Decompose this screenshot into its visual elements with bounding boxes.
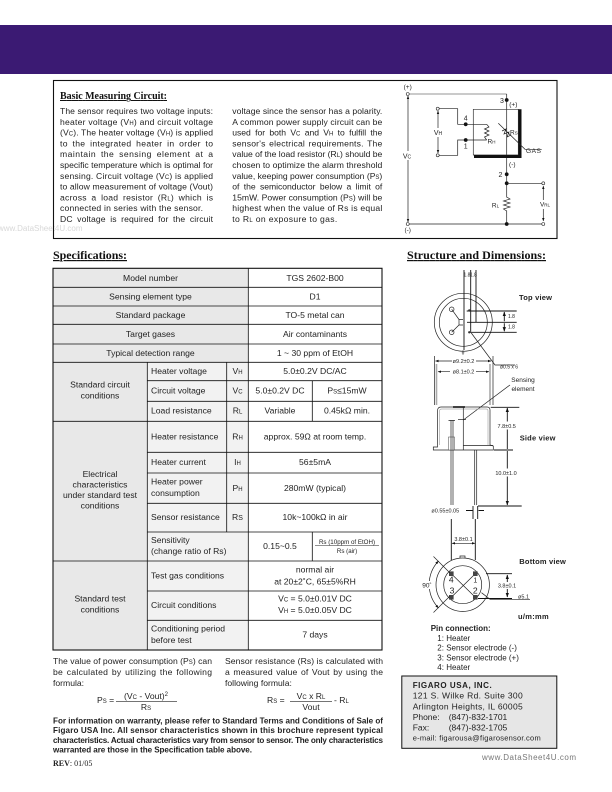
- text block: circuit description right column: used for both VC and VH to fulfill the: [232, 128, 383, 138]
- table group: electrical characteristics: Rs (air): [337, 548, 357, 555]
- diagram: top view: ø0.5 x 6: [500, 364, 518, 370]
- table group: electrical characteristics: conditions: [81, 500, 119, 510]
- revision note: REV: 01/05: [53, 759, 92, 768]
- text block: circuit description right column: [232, 106, 383, 224]
- table row: target gases: [126, 329, 347, 339]
- pin connection legend: Pin connection:: [431, 624, 491, 633]
- label: sensing element: element: [511, 386, 535, 393]
- table group: standard circuit conditions: [70, 366, 370, 416]
- text block: circuit description left column: The sensor requires two voltage inputs:: [60, 106, 213, 116]
- diagram: side view: ø9.2±0.2: [453, 359, 474, 365]
- specifications table: [53, 268, 382, 650]
- table group: electrical characteristics: approx. 59Ω at room temp.: [264, 432, 366, 442]
- table row: detection range: [106, 348, 353, 358]
- formula: power consumption: [97, 691, 177, 712]
- contact box: (847)-832-1701: [449, 712, 508, 722]
- table group: electrical characteristics: Heater power: [151, 476, 203, 486]
- text block: circuit description left column: DC voltage is required for the circuit: [60, 214, 214, 224]
- diagram: top view: 1.8: [470, 272, 477, 278]
- label: sensing element: [511, 377, 535, 393]
- pin connection legend: 2: Sensor electrode (-): [437, 644, 517, 653]
- label: top view: Top view: [519, 293, 552, 302]
- text block: power consumption formula intro: be calculated by utilizing the following: [53, 667, 212, 677]
- contact box: (847)-832-1705: [449, 723, 508, 733]
- text block: circuit description right column: to RL on exposure to gas.: [232, 214, 337, 224]
- text block: circuit description right column: 15mW. Power consumption (PS) will be: [232, 192, 383, 202]
- watermark: bottom right: www.DataSheet4U.com: [481, 753, 576, 762]
- label: units: u/m:mm: [518, 612, 549, 621]
- table group: standard circuit conditions: conditions: [81, 390, 119, 400]
- table group: standard test conditions: Conditioning period: [151, 624, 225, 634]
- formula: sensor resistance: VC x RL: [297, 691, 326, 701]
- table group: electrical characteristics: RS: [232, 512, 243, 522]
- circuit diagram: 2: [499, 172, 503, 179]
- heading: structure and dimensions: Structure and Dimensions:: [407, 248, 546, 262]
- text block: circuit description right column: value of the load resistor (RL) should be: [232, 149, 383, 159]
- table row: detection range: Typical detection range: [106, 348, 195, 358]
- table group: standard test conditions: VH = 5.0±0.05V DC: [278, 605, 352, 615]
- contact box: Phone:: [413, 712, 440, 722]
- table group: standard circuit conditions: PS≤15mW: [327, 386, 368, 396]
- table group: electrical characteristics: Heater current: [151, 457, 207, 467]
- table group: standard circuit conditions: VH: [232, 366, 243, 376]
- diagram: bottom view: 3.8±0.1: [498, 584, 516, 590]
- pin connection legend: 4: Heater: [437, 663, 471, 672]
- table group: standard circuit conditions: Circuit voltage: [151, 386, 206, 396]
- label: side view: Side view: [520, 434, 556, 443]
- text block: circuit description right column: voltage since the sensor has a polarity.: [232, 106, 382, 116]
- table group: electrical characteristics: consumption: [151, 488, 200, 498]
- circuit diagram: (-): [509, 162, 516, 168]
- circuit diagram: 4: [464, 116, 468, 122]
- text block: circuit description right column: chosen to optimize the alarm threshold: [232, 160, 383, 170]
- table row: sensing element type: Sensing element type: [109, 292, 192, 302]
- text block: circuit description left column: sensing. Circuit voltage (VC) is applied: [60, 171, 213, 181]
- table group: standard circuit conditions: Standard circuit: [70, 380, 130, 390]
- text block: sensor resistance formula intro: [225, 656, 383, 688]
- formula: power consumption: 2: [165, 692, 169, 698]
- text block: circuit description left column: to the integrated heater in order to: [60, 138, 213, 148]
- table group: electrical characteristics: IH: [234, 457, 241, 467]
- table group: electrical characteristics: under standard test: [63, 490, 138, 500]
- table group: electrical characteristics: 0.15~0.5: [263, 541, 297, 551]
- diagram: top view: 1.8: [508, 324, 515, 330]
- table group: electrical characteristics: Sensor resistance: [151, 512, 220, 522]
- table group: standard circuit conditions: 5.0±0.2V DC: [255, 386, 305, 396]
- table group: standard test conditions: at 20±2˚C, 65±5%RH: [274, 576, 356, 586]
- table row: standard package: Standard package: [116, 310, 186, 320]
- panel: basic measuring circuit: [54, 80, 557, 238]
- table group: standard circuit conditions: 5.0±0.2V DC/AC: [283, 366, 347, 376]
- text block: power consumption formula intro: formula:: [53, 678, 84, 688]
- text block: sensor resistance formula intro: Sensor resistance (Rs) is calculated with: [225, 656, 383, 666]
- table group: standard test conditions: conditions: [81, 604, 119, 614]
- text block: circuit description left column: specific temperature which is optimal for: [60, 160, 213, 170]
- table group: standard circuit conditions: Variable: [265, 406, 296, 416]
- diagram: bottom view: 2: [473, 585, 478, 595]
- header banner: [0, 25, 612, 74]
- text block: sensor resistance formula intro: following formula:: [225, 678, 292, 688]
- table group: standard test conditions: VC = 5.0±0.01V DC: [278, 594, 352, 604]
- diagram: bottom view: 1: [473, 578, 477, 585]
- label: sensing element: Sensing: [511, 377, 535, 384]
- table row: standard package: [116, 310, 345, 320]
- text block: circuit description left column: maintain the sensing element at a: [60, 149, 213, 159]
- text block: warranty notice: characteristics. Actual characteristics vary from sensor to sensor. The only characteristics: [53, 736, 383, 745]
- formula: power consumption: RS: [141, 702, 151, 712]
- diagram: bottom view: 3.8±0.1: [454, 537, 473, 543]
- table group: standard circuit conditions: Heater voltage: [151, 366, 207, 376]
- table row: model number: Model number: [123, 273, 178, 283]
- text block: circuit description left column: (VC). The heater voltage (VH) is applied: [60, 128, 213, 138]
- formula: sensor resistance: [267, 691, 349, 712]
- text block: circuit description right column: sensor's electrical requirements. The: [232, 138, 383, 148]
- circuit diagram: [401, 84, 551, 234]
- circuit diagram: 1: [464, 144, 468, 150]
- table group: standard circuit conditions: RL: [233, 406, 243, 416]
- heading: specifications: Specifications:: [53, 248, 127, 262]
- table row: target gases: Air contaminants: [283, 329, 347, 339]
- table row: sensing element type: [109, 292, 321, 302]
- diagram: side view: ø8.1±0.2: [453, 370, 474, 376]
- circuit diagram: (-): [404, 227, 411, 234]
- text block: circuit description left column: [60, 106, 214, 224]
- text block: circuit description left column: across a load resistor (RL) which is: [60, 192, 213, 202]
- diagram: side view: ø0.55±0.05: [431, 509, 459, 515]
- pin connection legend: [431, 624, 519, 672]
- table group: standard test conditions: 7 days: [302, 630, 328, 640]
- table group: standard circuit conditions: Load resistance: [151, 406, 212, 416]
- table group: electrical characteristics: 56±5mA: [299, 457, 331, 467]
- text block: circuit description right column: value, keeping power consumption (PS): [232, 171, 382, 181]
- pin connection legend: 3: Sensor electrode (+): [437, 654, 519, 662]
- table group: standard circuit conditions: VC: [232, 386, 243, 396]
- contact box: Fax:: [413, 723, 429, 733]
- contact box: e-mail: figarousa@figarosensor.com: [413, 733, 541, 742]
- text block: warranty notice: For information on warranty, please refer to Standard Terms and Conditions of Sale of: [53, 716, 383, 726]
- table group: electrical characteristics: 10k~100kΩ in air: [283, 512, 348, 522]
- table group: electrical characteristics: Sensitivity: [151, 535, 190, 545]
- text block: circuit description left column: to allow measurement of voltage (Vout): [60, 182, 213, 192]
- diagram: bottom view: [422, 519, 566, 621]
- circuit diagram: VC: [403, 154, 412, 160]
- watermark: left: www.DataSheet4U.com: [0, 224, 83, 233]
- circuit diagram: 3: [500, 98, 504, 105]
- table row: sensing element type: D1: [310, 292, 321, 302]
- table row: target gases: Target gases: [126, 329, 175, 339]
- diagram: bottom view: ø5.1: [518, 594, 529, 600]
- circuit diagram: RH: [488, 138, 495, 146]
- diagram: side view: [431, 356, 556, 519]
- table group: electrical characteristics: Electrical: [83, 469, 118, 479]
- text block: power consumption formula intro: The value of power consumption (PS) can: [53, 656, 212, 666]
- text block: warranty notice: warranted are those in the Specification table above.: [52, 746, 252, 754]
- text block: circuit description left column: connected in series with the sensor.: [60, 203, 203, 213]
- text block: power consumption formula intro: [53, 656, 212, 688]
- table group: standard test conditions: [74, 564, 356, 645]
- table group: standard test conditions: Standard test: [74, 594, 126, 604]
- diagram: top view: θ: [462, 350, 465, 356]
- diagram: top view: 1.8: [508, 314, 515, 320]
- diagram: bottom view: 4: [449, 575, 454, 585]
- contact box: 121 S. Wilke Rd. Suite 300: [413, 690, 523, 700]
- text block: warranty notice: [52, 716, 383, 754]
- text block: warranty notice: Figaro USA Inc. All sensor characteristics shown in this brochure represent typical: [53, 726, 383, 735]
- diagram: bottom view: 90˚: [422, 582, 432, 590]
- diagram: bottom view: 3: [450, 585, 455, 595]
- table group: electrical characteristics: [63, 432, 379, 556]
- circuit diagram: (+): [509, 102, 517, 108]
- formula: sensor resistance: - RL: [334, 695, 349, 705]
- circuit diagram: GAS: [526, 148, 542, 155]
- circuit diagram: (+): [404, 84, 412, 91]
- circuit diagram: VRL: [540, 202, 551, 208]
- table group: electrical characteristics: PH: [232, 483, 243, 493]
- text block: circuit description right column: A common power supply circuit can be: [232, 117, 383, 127]
- heading: basic measuring circuit: Basic Measuring Circuit:: [60, 91, 167, 102]
- diagram: top view: [434, 270, 552, 370]
- text block: circuit description right column: highest when the value of Rs is equal: [232, 203, 382, 213]
- table group: electrical characteristics: RH: [232, 432, 243, 442]
- table group: standard test conditions: Test gas conditions: [151, 570, 224, 580]
- contact box: FIGARO USA, INC.: [413, 681, 492, 690]
- contact box: [402, 676, 557, 748]
- table group: electrical characteristics: Rs (10ppm of EtOH): [319, 539, 375, 546]
- label: bottom view: Bottom view: [519, 557, 566, 566]
- diagram: top view: 1.8: [464, 272, 471, 278]
- pin connection legend: 1: Heater: [437, 634, 471, 643]
- table group: standard circuit conditions: 0.45kΩ min.: [324, 406, 370, 416]
- diagram: side view: 7.8±0.5: [498, 424, 516, 430]
- text block: circuit description left column: heater voltage (VH) and circuit voltage: [60, 117, 213, 127]
- table row: model number: [123, 273, 344, 283]
- table group: standard test conditions: before test: [151, 635, 192, 645]
- circuit diagram: RL: [492, 202, 500, 210]
- text block: sensor resistance formula intro: a measured value of Vout by using the: [225, 667, 383, 677]
- formula: sensor resistance: RS =: [267, 695, 285, 705]
- table row: standard package: TO-5 metal can: [285, 310, 345, 320]
- table group: standard test conditions: normal air: [296, 564, 334, 574]
- table group: electrical characteristics: 280mW (typical): [284, 483, 346, 493]
- formula: sensor resistance: Vout: [302, 702, 320, 712]
- circuit diagram: VH: [434, 130, 443, 137]
- circuit diagram: RS: [510, 130, 518, 136]
- table row: detection range: 1 ~ 30 ppm of EtOH: [277, 348, 353, 358]
- diagram: side view: 10.0±1.0: [495, 471, 517, 477]
- formula: power consumption: PS =: [97, 695, 114, 705]
- contact box: Arlington Heights, IL 60005: [413, 701, 523, 711]
- formula: power consumption: (VC - Vout): [124, 691, 165, 701]
- text block: circuit description right column: of the semiconductor below a limit of: [232, 182, 383, 192]
- table group: electrical characteristics: (change ratio of Rs): [151, 546, 227, 556]
- table group: electrical characteristics: characteristics: [73, 480, 127, 490]
- table group: electrical characteristics: Heater resistance: [151, 432, 219, 442]
- table group: standard test conditions: Circuit conditions: [151, 600, 216, 610]
- table row: model number: TGS 2602-B00: [286, 273, 344, 283]
